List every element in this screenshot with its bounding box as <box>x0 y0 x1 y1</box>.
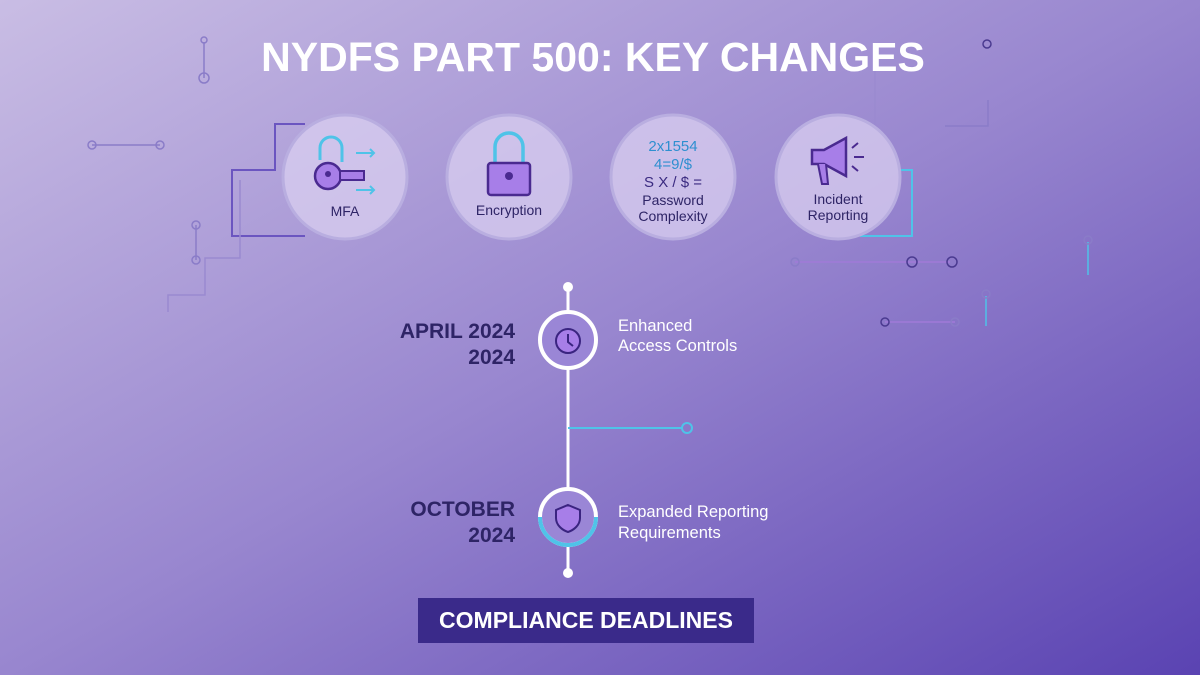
milestone: October 2024 <box>410 489 768 547</box>
milestone: April 2024: 2024 <box>468 346 515 369</box>
milestone: April 2024: Enhanced <box>618 317 692 335</box>
milestone: October 2024: 2024 <box>468 524 515 547</box>
icon card: Incident Reporting <box>776 115 900 239</box>
banner: compliance deadlines <box>418 598 754 643</box>
icon card: MFA <box>283 115 407 239</box>
icon card: Password Complexity: Password <box>642 192 704 208</box>
banner: compliance deadlines: COMPLIANCE DEADLINES <box>439 607 733 633</box>
milestone: April 2024: APRIL 2024 <box>400 320 515 343</box>
milestone: October 2024: Expanded Reporting <box>618 503 768 521</box>
milestone: October 2024: Requirements <box>618 524 721 542</box>
icon card: Password Complexity <box>611 115 735 239</box>
milestone: April 2024 <box>400 312 737 369</box>
icon card: Encryption <box>447 115 571 239</box>
icon card: Password Complexity: Complexity <box>638 208 708 224</box>
icon card: Password Complexity: 4=9/$ <box>654 156 693 173</box>
timeline <box>563 282 692 578</box>
milestone: October 2024: OCTOBER <box>410 498 515 521</box>
icon card: Encryption: Encryption <box>476 202 542 218</box>
milestone: April 2024: Access Controls <box>618 337 737 355</box>
icon card: Incident Reporting: Incident <box>813 191 863 207</box>
icon card: Password Complexity: S X / $ = <box>644 174 702 191</box>
icon card: Incident Reporting: Reporting <box>808 207 868 223</box>
title: NYDFS PART 500: KEY CHANGES <box>261 34 925 80</box>
icon card: Password Complexity: 2x1554 <box>648 138 698 155</box>
icon card: MFA: MFA <box>331 203 360 219</box>
